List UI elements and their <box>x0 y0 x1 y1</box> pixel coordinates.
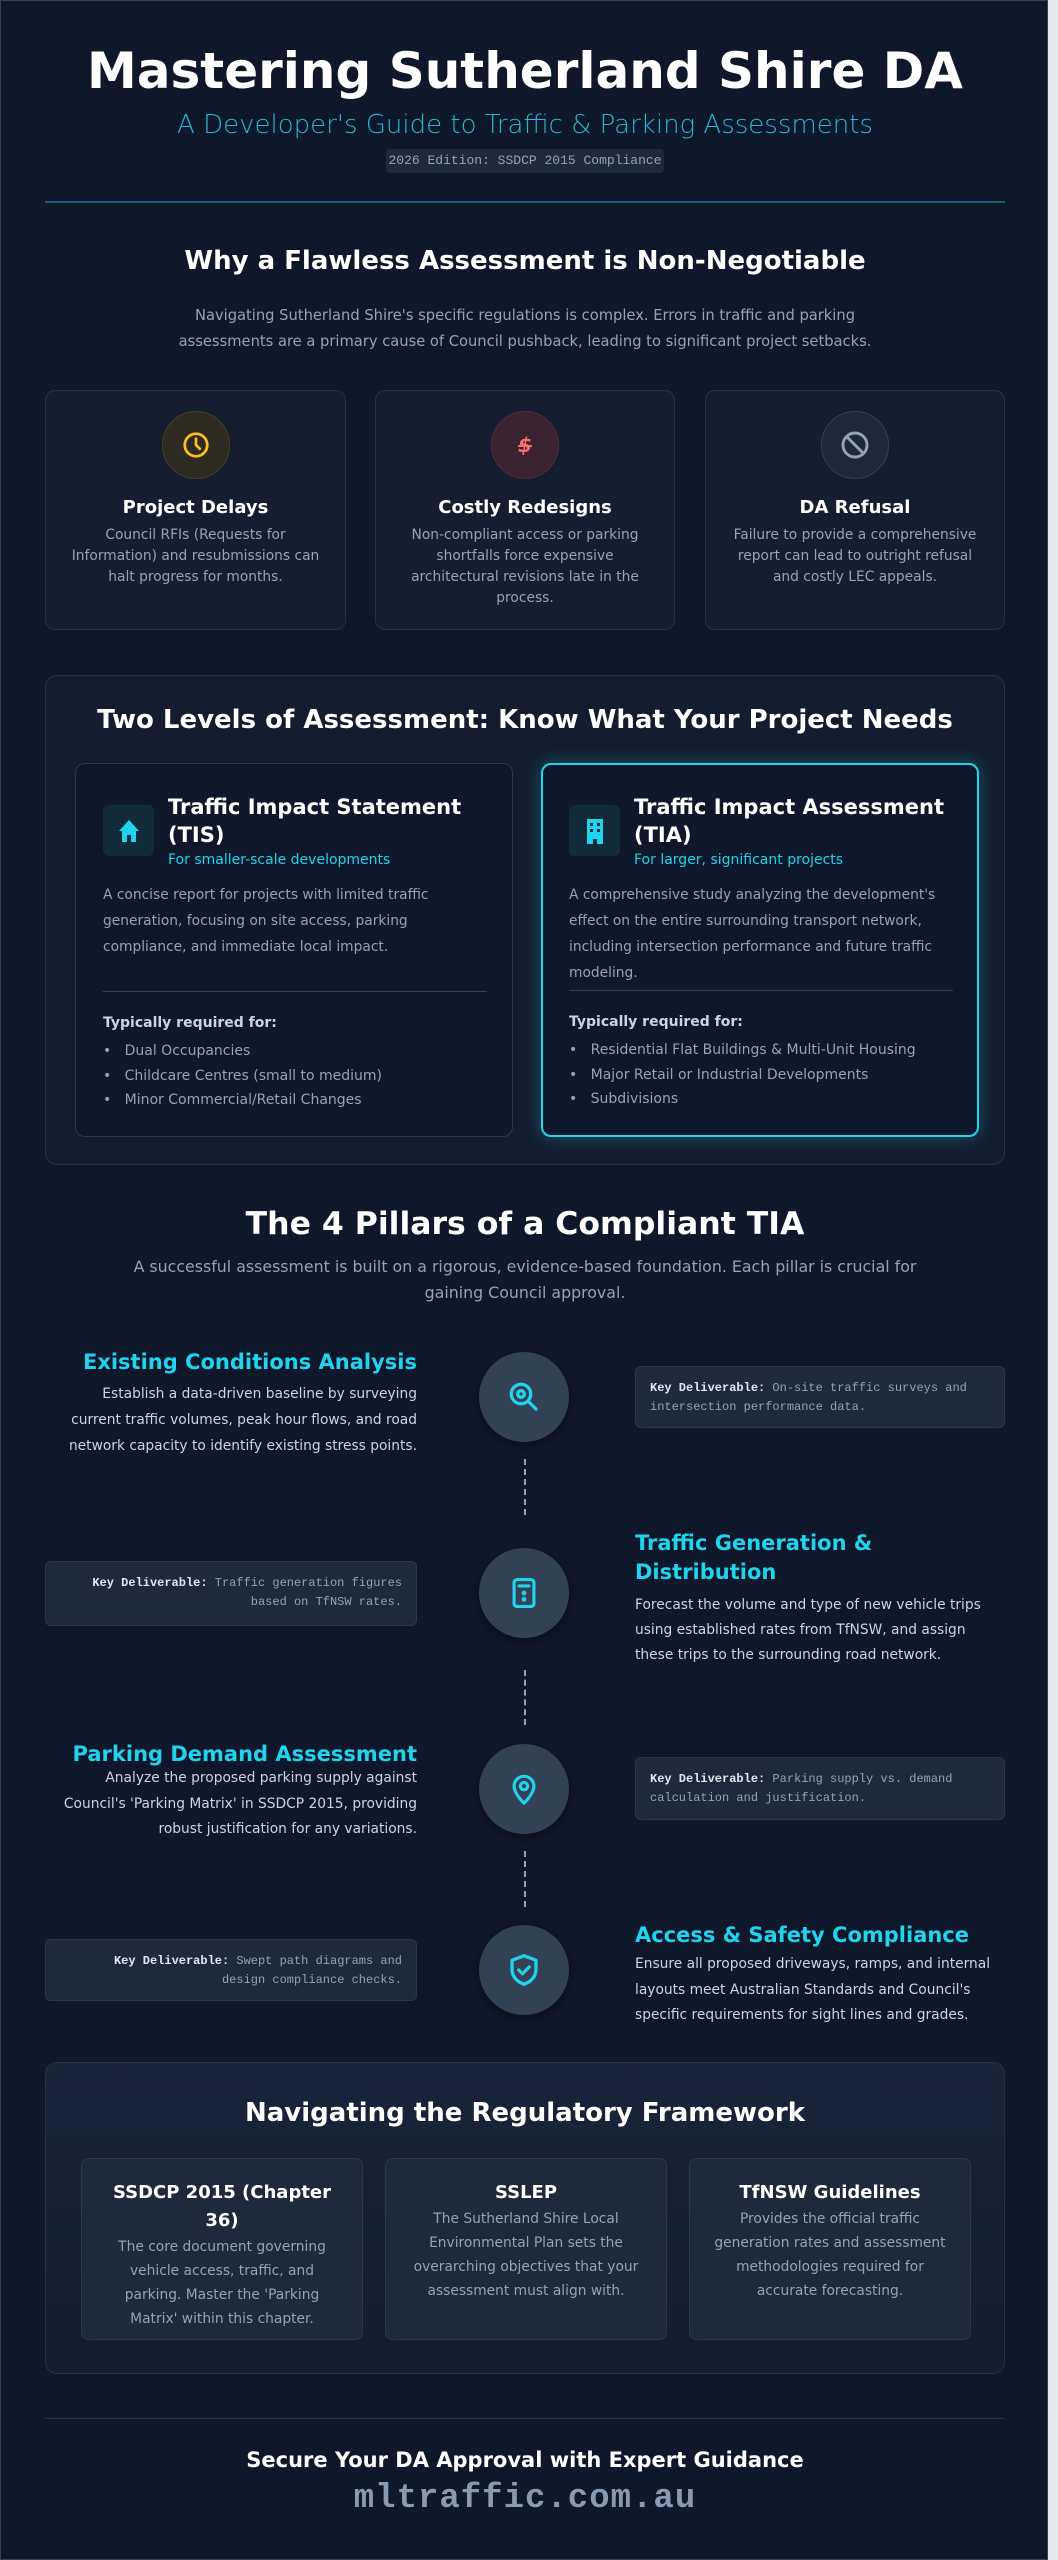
card: SSDCP: The core document governing vehicle access, traffic, and parking. Master the 'Parking Matrix' within this chapter. <box>118 2239 326 2327</box>
callout: deliverable 2 <box>45 1561 417 1626</box>
title: Mastering Sutherland Shire DA <box>87 42 963 100</box>
card: SSDCP: SSDCP 2015 (Chapter 36) <box>113 2182 331 2231</box>
card: SSDCP <box>81 2158 363 2340</box>
card: SSLEP <box>385 2158 667 2340</box>
required list: • Residential Flat Buildings & Multi-Unit Housing <box>569 1042 916 1058</box>
text: Analyze the proposed parking supply against Council's 'Parking Matrix' in SSDCP 2015, providing robust justification for any variations. <box>64 1770 417 1837</box>
subtitle: For larger, significant projects <box>634 852 843 868</box>
heading: Navigating the Regulatory Framework <box>245 2098 805 2128</box>
text: Failure to provide a comprehensive report can lead to outright refusal and costly LEC appeals. <box>734 527 976 585</box>
card: TIS <box>75 763 513 1137</box>
description: A comprehensive study analyzing the development's effect on the entire surrounding transport network, including intersection performance and future traffic modeling. <box>569 887 935 981</box>
icon: map pin <box>479 1744 569 1834</box>
text: Non-compliant access or parking shortfalls force expensive architectural revisions late in the process. <box>411 527 639 606</box>
card: TIA <box>541 763 979 1137</box>
icon: dollar <box>491 411 559 479</box>
required list: Typically required for: <box>569 1014 743 1030</box>
title: DA Refusal <box>800 497 910 518</box>
required list: • Major Retail or Industrial Developments <box>569 1066 868 1082</box>
card: SSLEP: SSLEP <box>495 2182 557 2203</box>
title: Traffic Generation & Distribution <box>635 1531 872 1584</box>
heading: 4 pillars: The 4 Pillars of a Compliant TIA <box>246 1206 804 1242</box>
required list: Typically required for: <box>103 1015 277 1031</box>
title: Project Delays <box>123 497 268 518</box>
icon: dollar: $ <box>518 433 532 457</box>
callout: deliverable 1 <box>635 1366 1005 1428</box>
subtitle: For smaller-scale developments <box>168 852 390 868</box>
card: TfNSW: TfNSW Guidelines <box>739 2182 921 2203</box>
heading: why: Why a Flawless Assessment is Non-Negotiable <box>184 246 866 276</box>
callout: deliverable 4 <box>45 1939 417 2001</box>
panel: costly redesigns <box>375 390 675 630</box>
panel: DA refusal <box>705 390 1005 630</box>
required list <box>103 1015 382 1108</box>
card: TfNSW: Provides the official traffic generation rates and assessment methodologies required for accurate forecasting. <box>714 2211 946 2299</box>
pillars intro: A successful assessment is built on a rigorous, evidence-based foundation. Each pillar is crucial for gaining Council approval. <box>134 1257 916 1302</box>
required list: • Childcare Centres (small to medium) <box>103 1068 382 1084</box>
text: Establish a data-driven baseline by surveying current traffic volumes, peak hour flows, and road network capacity to identify existing stress points. <box>69 1386 417 1454</box>
title: Traffic Impact Statement (TIS) <box>168 795 461 847</box>
required list: • Dual Occupancies <box>103 1043 250 1059</box>
callout: deliverable 4: Key Deliverable: Swept path diagrams and design compliance checks. <box>114 1954 402 1987</box>
title: Access & Safety Compliance <box>635 1923 969 1947</box>
text: Ensure all proposed driveways, ramps, and internal layouts meet Australian Standards and Council's specific requirements for sight lines and grades. <box>635 1956 990 2023</box>
required list <box>569 1014 916 1107</box>
panel: project delays <box>45 390 346 630</box>
card: TfNSW <box>689 2158 971 2340</box>
text: Council RFIs (Requests for Information) and resubmissions can halt progress for months. <box>72 527 319 585</box>
required list: • Subdivisions <box>569 1091 678 1107</box>
edition badge: 2026 Edition: SSDCP 2015 Compliance <box>388 153 662 168</box>
description: A concise report for projects with limited traffic generation, focusing on site access, parking compliance, and immediate local impact. <box>103 887 429 955</box>
pillar 3: parking demand <box>64 1742 417 1837</box>
card: SSLEP: The Sutherland Shire Local Environmental Plan sets the overarching objectives that your assessment must align with. <box>414 2211 638 2299</box>
title: Parking Demand Assessment <box>73 1742 417 1766</box>
icon: search <box>479 1352 569 1442</box>
required list: • Minor Commercial/Retail Changes <box>103 1092 362 1108</box>
panel: two levels <box>45 675 1005 1165</box>
icon: building <box>569 805 620 856</box>
callout: deliverable 3: Key Deliverable: Parking supply vs. demand calculation and justification. <box>650 1772 952 1805</box>
text: Forecast the volume and type of new vehicle trips using established rates from TfNSW, and assign these trips to the surrounding road network. <box>635 1597 981 1663</box>
footer heading: Secure Your DA Approval with Expert Guidance <box>246 2448 804 2472</box>
pillar 4: access & safety <box>635 1923 990 2023</box>
icon: house <box>103 805 154 856</box>
callout: deliverable 3 <box>635 1757 1005 1820</box>
pillar 1: existing conditions <box>69 1350 417 1454</box>
callout: deliverable 2: Key Deliverable: Traffic generation figures based on TfNSW rates. <box>92 1576 402 1609</box>
icon: shield <box>479 1925 569 2015</box>
edition badge <box>386 149 664 173</box>
subtitle: A Developer's Guide to Traffic & Parking Assessments <box>177 110 873 140</box>
footer url: mltraffic.com.au <box>354 2480 696 2518</box>
pillar 2: traffic generation <box>635 1531 981 1663</box>
title: Traffic Impact Assessment (TIA) <box>634 795 944 847</box>
title: Costly Redesigns <box>438 497 612 518</box>
intro paragraph: Navigating Sutherland Shire's specific regulations is complex. Errors in traffic and parking assessments are a primary cause of Council pushback, leading to significant project setbacks. <box>179 307 871 350</box>
title: Existing Conditions Analysis <box>83 1350 417 1374</box>
icon: ban <box>821 411 889 479</box>
heading: Two Levels of Assessment: Know What Your Project Needs <box>97 705 953 735</box>
panel: regulatory framework <box>45 2062 1005 2374</box>
icon: calculator <box>479 1548 569 1638</box>
callout: deliverable 1: Key Deliverable: On-site traffic surveys and intersection performance data. <box>650 1381 967 1414</box>
icon: clock <box>162 411 230 479</box>
